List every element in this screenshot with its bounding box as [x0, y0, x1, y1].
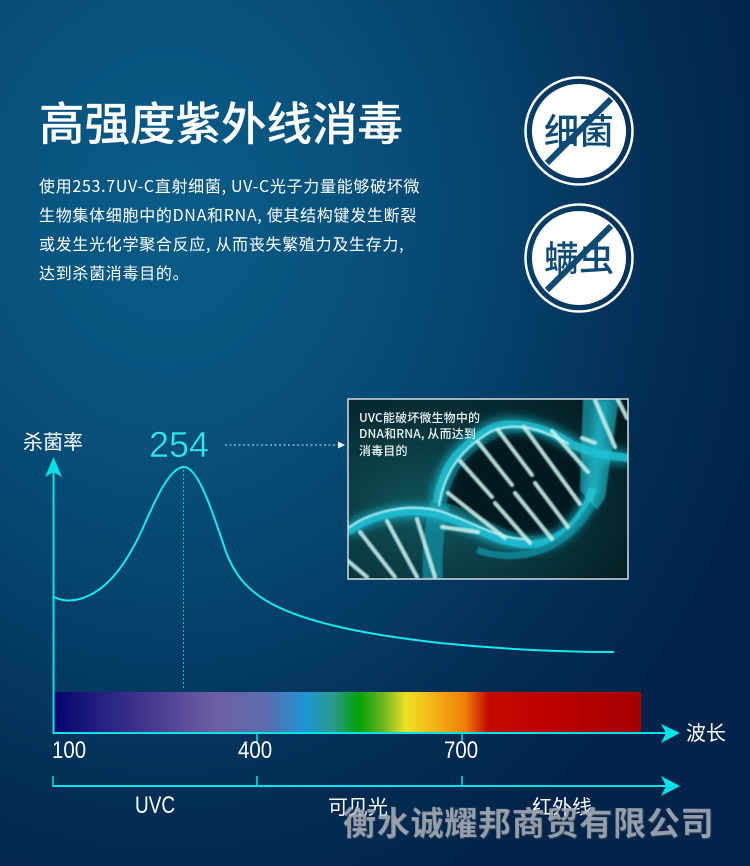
body text: 或发生光化学聚合反应, 从而丧失繁殖力及生存力, — [39, 231, 404, 255]
DNA image panel — [347, 398, 629, 580]
helix strands — [348, 424, 629, 579]
x axis arrow — [52, 724, 680, 743]
rungs — [348, 400, 627, 577]
image caption: 消毒目的 — [359, 442, 408, 459]
icon: no bacteria — [524, 76, 634, 186]
right ribbon — [580, 399, 619, 510]
dotted arrow to image — [225, 442, 345, 448]
icon: no bacteria: 细菌 — [544, 104, 614, 155]
icon: no mites — [524, 203, 634, 313]
helix glow — [348, 399, 629, 544]
icon: no mites: 螨虫 — [544, 231, 614, 282]
peak value 254: 254 — [149, 424, 209, 465]
range label visible: 可见光 — [328, 791, 388, 820]
body text: 使用253.7UV-C直射细菌, UV-C光子力量能够破坏微 — [39, 173, 420, 197]
x axis label: 波长 — [686, 717, 726, 746]
sterilization curve — [54, 467, 614, 652]
y axis label: 杀菌率 — [23, 426, 83, 455]
image caption: DNA和RNA, 从而达到 — [359, 425, 476, 442]
dark inside of helix — [447, 432, 585, 536]
range arrow — [52, 776, 680, 796]
range label UVC: UVC — [135, 792, 175, 819]
tick label 400: 400 — [238, 737, 272, 764]
title: 高强度紫外线消毒 — [39, 88, 403, 154]
spectrum bar — [54, 692, 641, 732]
tick label 700: 700 — [444, 737, 478, 764]
y axis arrow — [45, 457, 62, 733]
body text — [39, 173, 420, 284]
body text: 达到杀菌消毒目的。 — [39, 260, 189, 284]
image caption: UVC能破坏微生物中的 — [359, 409, 480, 426]
watermark: 衡水诚耀邦商贸有限公司 — [343, 797, 714, 845]
peak drop line — [182, 470, 184, 690]
range label infrared: 红外线 — [532, 791, 592, 820]
tick label 100: 100 — [52, 737, 86, 764]
body text: 生物集体细胞中的DNA和RNA, 使其结构键发生断裂 — [39, 202, 417, 226]
